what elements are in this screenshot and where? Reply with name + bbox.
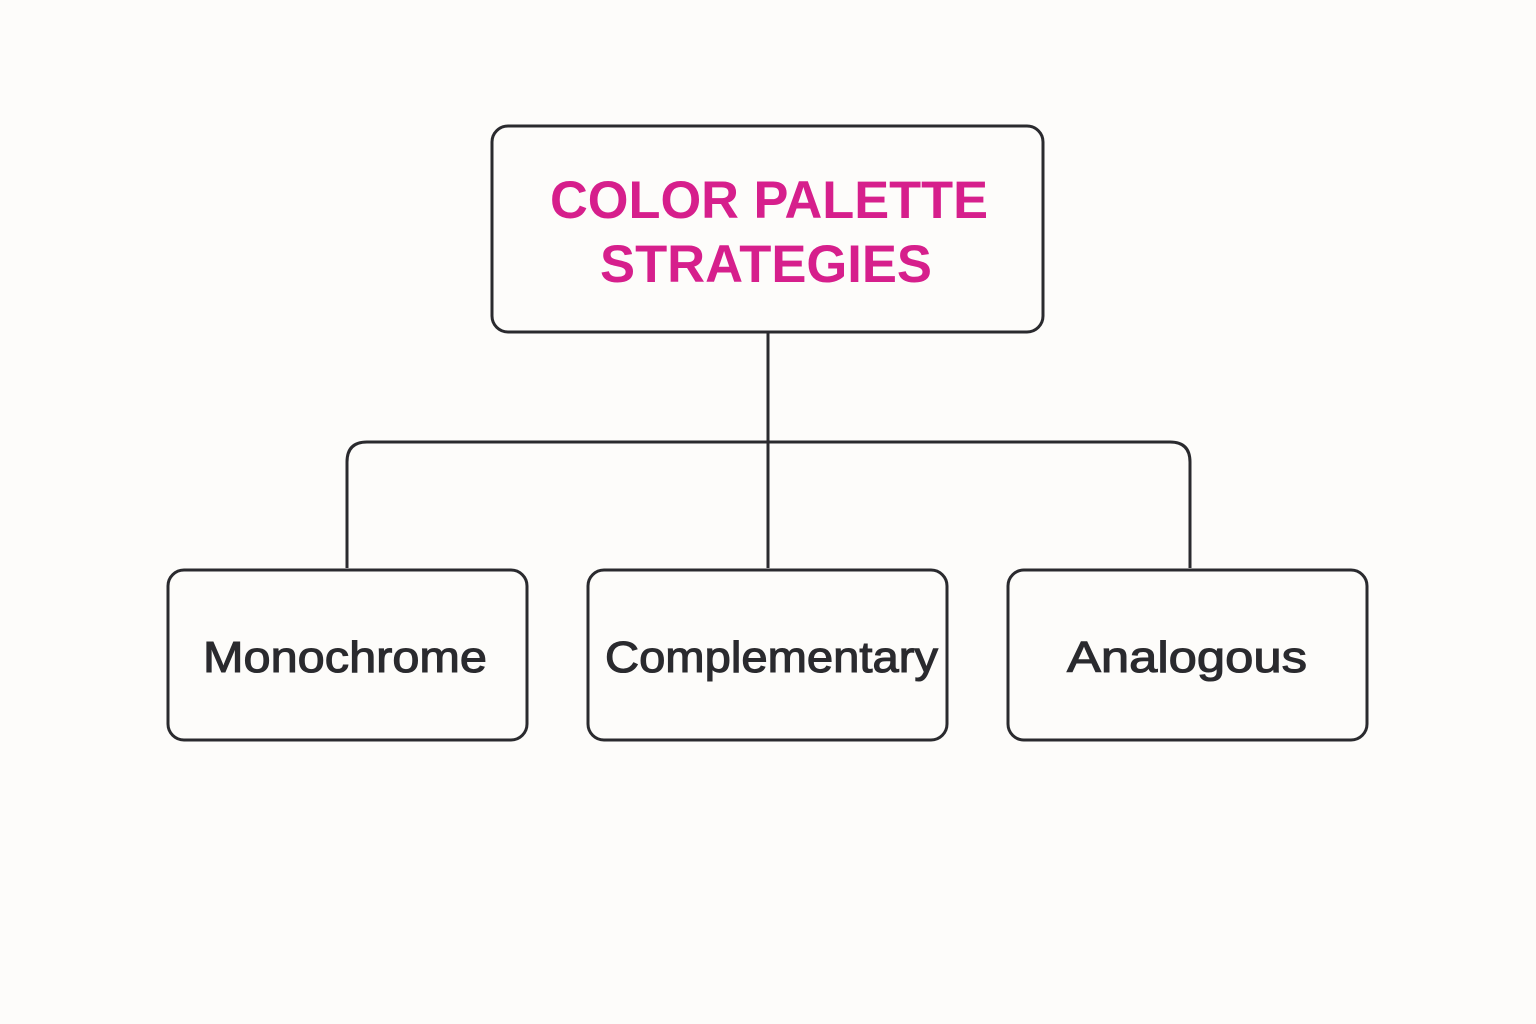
box: Analogous: Analogous [1067, 633, 1307, 682]
box: Complementary [588, 570, 947, 740]
title box [492, 126, 1043, 332]
box: Monochrome: Monochrome [203, 633, 487, 682]
title text: COLOR PALETTE [550, 171, 988, 230]
connector lines [347, 333, 1190, 568]
box: Monochrome [168, 570, 527, 740]
title text [550, 171, 988, 294]
title text: STRATEGIES [600, 235, 932, 294]
box: Analogous [1008, 570, 1367, 740]
box: Complementary: Complementary [605, 633, 938, 682]
